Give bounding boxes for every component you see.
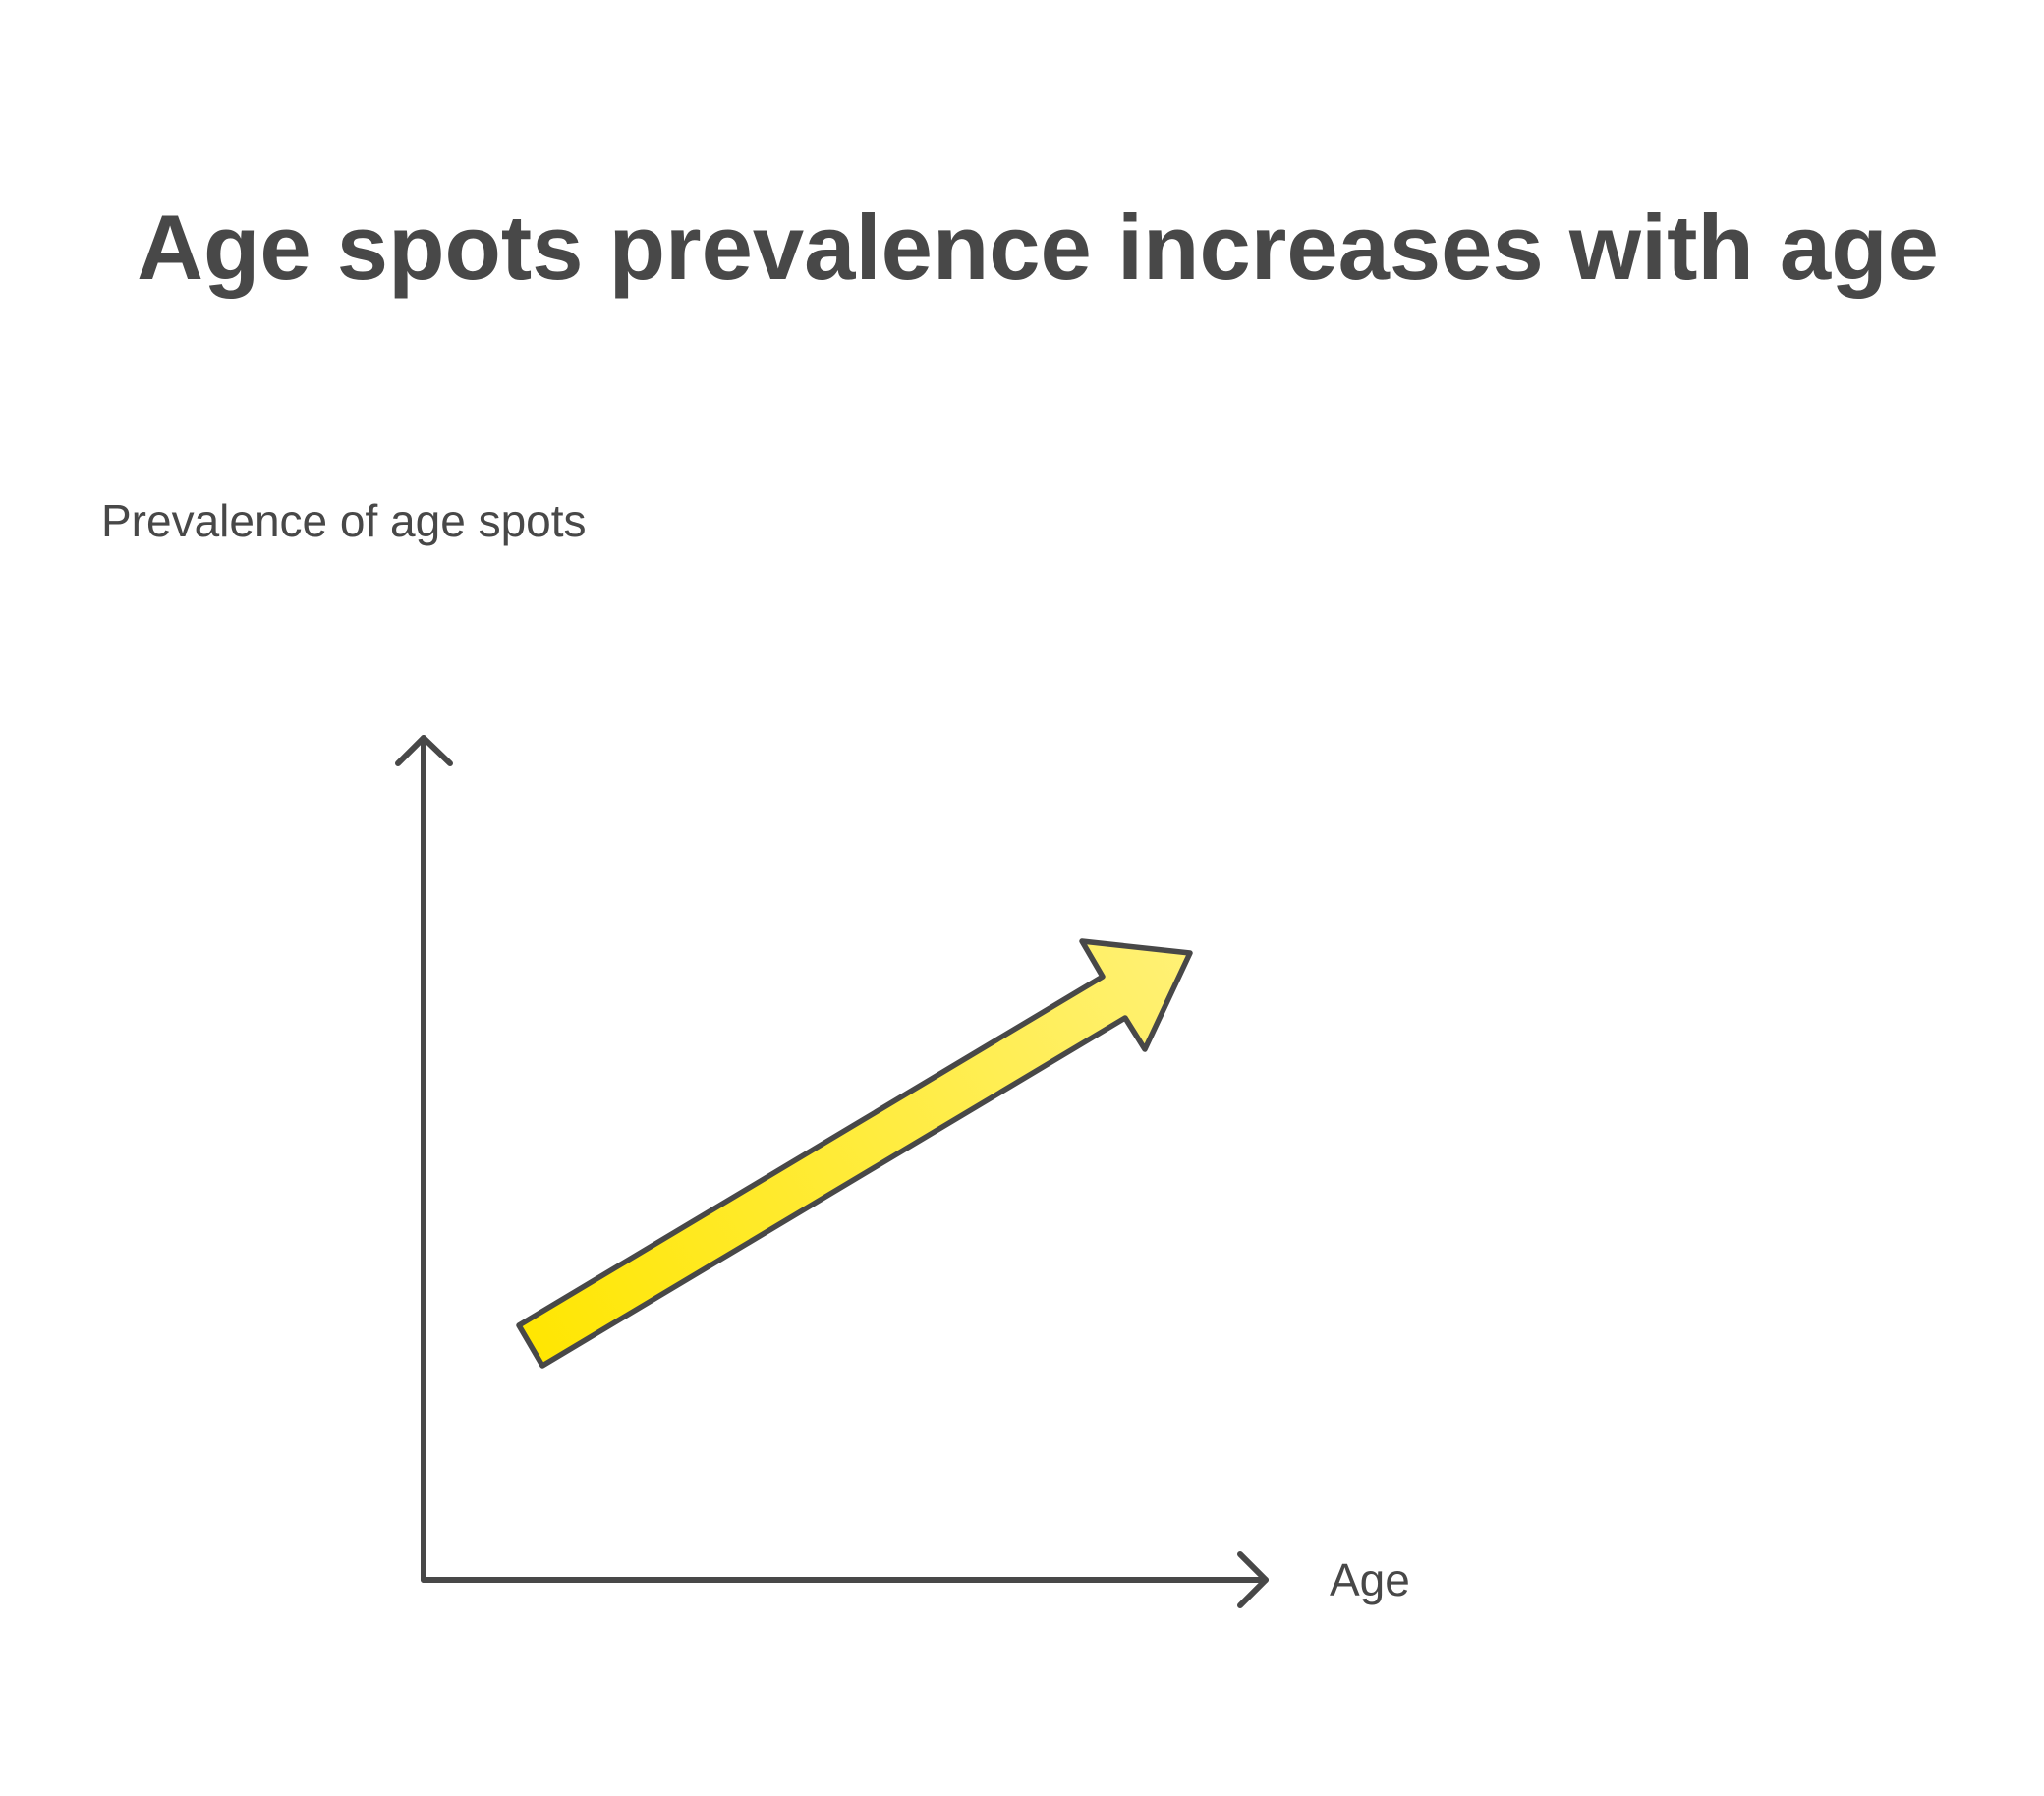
title: Age spots prevalence increases with age <box>137 196 1939 299</box>
arrow: increasing trend <box>519 941 1190 1366</box>
x-axis label: Age <box>1330 1554 1410 1605</box>
y axis <box>398 738 450 1580</box>
x axis <box>424 1554 1266 1605</box>
y-axis label: Prevalence of age spots <box>101 495 587 546</box>
